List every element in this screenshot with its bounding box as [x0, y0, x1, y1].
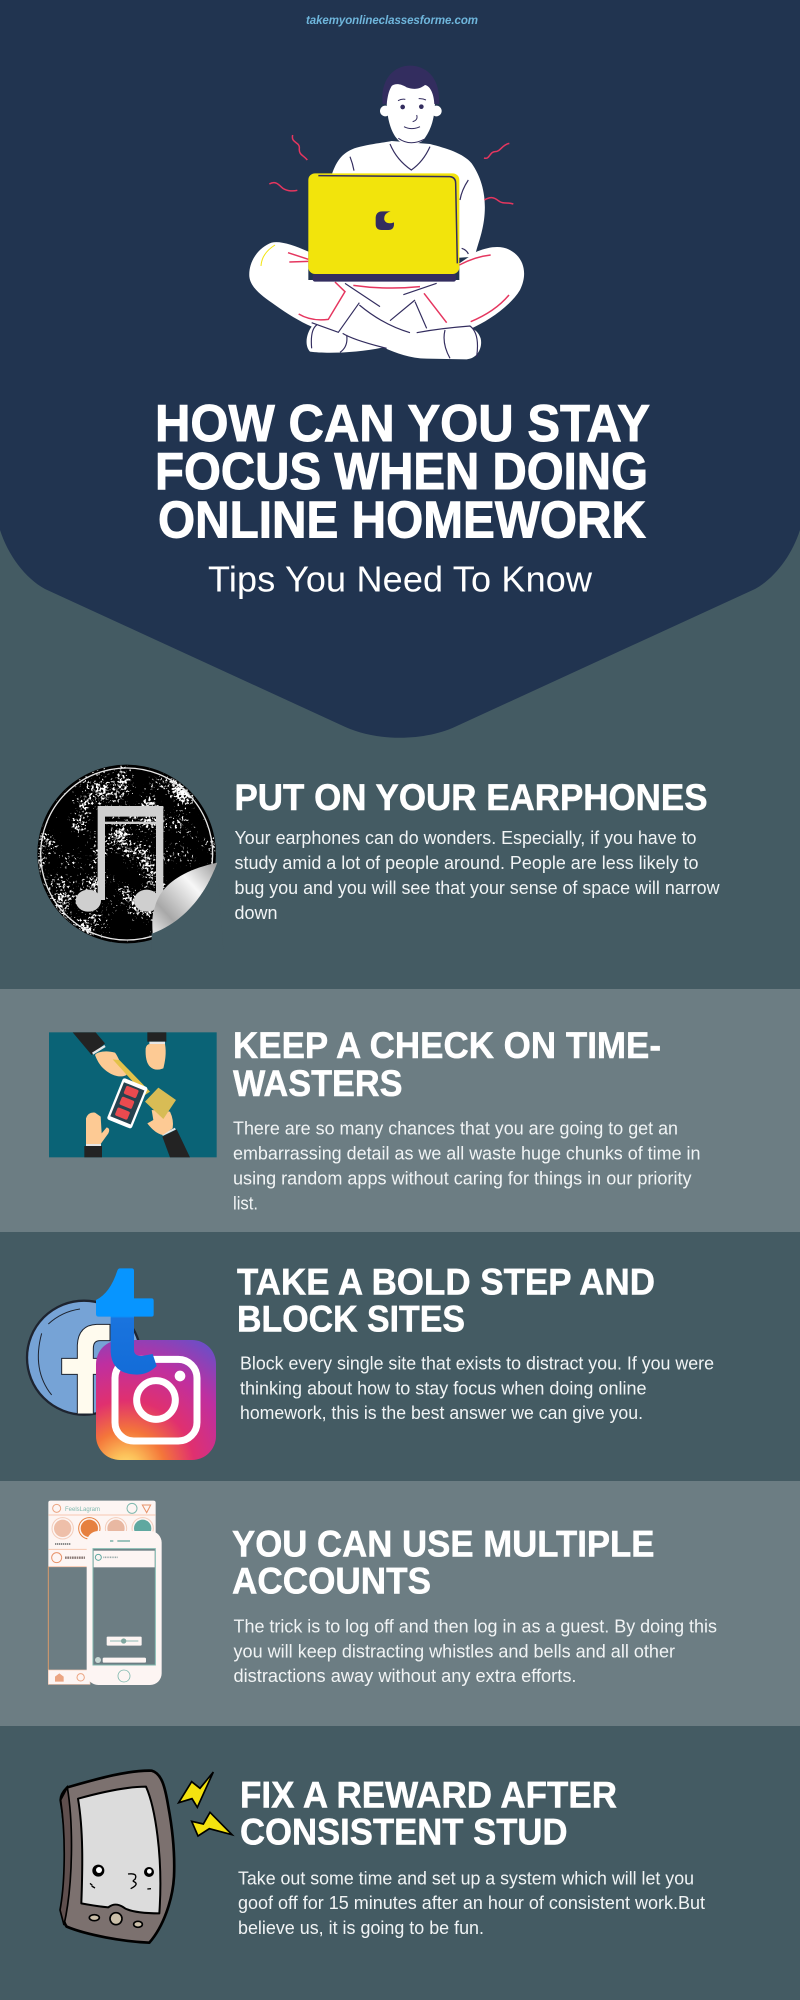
body text: believe us, it is going to be fun. [238, 1917, 484, 1938]
image: hands swatting a phone [49, 1032, 217, 1157]
body text: thinking about how to stay focus when doing online [240, 1377, 646, 1398]
body text: goof off for 15 minutes after an hour of consistent work.But [238, 1892, 705, 1913]
title: HOW CAN YOU STAY [155, 395, 650, 453]
body text: study amid a lot of people around. People are less likely to [234, 852, 698, 873]
body text: Take out some time and set up a system which will let you [238, 1867, 694, 1888]
website url: takemyonlineclassesforme.com [306, 15, 478, 27]
head [350, 66, 468, 254]
body text: list. [233, 1192, 258, 1213]
panel: section 2 band [0, 989, 800, 1232]
heading [237, 1261, 655, 1340]
body text [234, 1615, 717, 1686]
panel: section 2 [49, 1025, 700, 1213]
body text: There are so many chances that you are going to get an [233, 1117, 678, 1138]
body text: distractions away without any extra efforts. [234, 1665, 576, 1686]
heading [233, 1025, 661, 1104]
heading: FIX A REWARD AFTER [240, 1775, 617, 1816]
heading: WASTERS [233, 1063, 402, 1104]
heading: ACCOUNTS [232, 1560, 431, 1601]
leg lines [288, 253, 509, 323]
body text [240, 1352, 714, 1423]
lightning bolts [179, 1772, 232, 1836]
heading: KEEP A CHECK ON TIME- [233, 1025, 661, 1066]
title: FOCUS WHEN DOING [155, 443, 648, 501]
heading: YOU CAN USE MULTIPLE [232, 1524, 654, 1565]
body text [234, 827, 720, 923]
title: ONLINE HOMEWORK [158, 492, 646, 550]
icon: two phone accounts [48, 1501, 162, 1685]
back phone [48, 1501, 156, 1684]
body text: down [234, 902, 278, 923]
panel: section 3 [27, 1261, 714, 1460]
back phone: FeelsLagram [65, 1506, 100, 1513]
body text: embarrassing detail as we all waste huge chunks of time in [233, 1142, 700, 1163]
body text: The trick is to log off and then log in as a guest. By doing this [234, 1615, 717, 1636]
buttons [89, 1915, 99, 1921]
facebook [27, 1301, 141, 1415]
panel: section 1 [37, 765, 720, 950]
screen [78, 1787, 160, 1913]
body text: bug you and you will see that your sense of space will narrow [234, 877, 720, 898]
front phone [87, 1531, 162, 1685]
legs [249, 242, 524, 359]
subtitle: Tips You Need To Know [208, 558, 593, 600]
title [155, 395, 650, 550]
illustration: man with laptop [249, 66, 524, 359]
panel: section 5 [60, 1771, 705, 1943]
body text: using random apps without caring for things in our priority [233, 1167, 692, 1188]
face [92, 1865, 104, 1877]
body text [233, 1117, 700, 1213]
heading: CONSISTENT STUD [240, 1811, 568, 1852]
panel: section 4 [48, 1501, 717, 1686]
laptop [308, 173, 459, 282]
icon: buzzing cartoon phone [60, 1771, 232, 1943]
body text: homework, this is the best answer we can give you. [240, 1402, 643, 1423]
heading [240, 1775, 617, 1852]
body text: Block every single site that exists to distract you. If you were [240, 1352, 714, 1373]
body text [238, 1867, 705, 1938]
tumblr [96, 1268, 157, 1375]
body text: you will keep distracting whistles and bells and all other [234, 1640, 675, 1661]
body text: Your earphones can do wonders. Especially, if you have to [234, 827, 696, 848]
icon: music sticker [37, 765, 223, 950]
heading: TAKE A BOLD STEP AND [237, 1261, 655, 1302]
torso [332, 141, 485, 267]
heading [232, 1524, 654, 1601]
heading: BLOCK SITES [237, 1299, 465, 1340]
panel: header shape [0, 0, 800, 738]
heading: PUT ON YOUR EARPHONES [234, 777, 708, 818]
instagram [96, 1340, 216, 1460]
squiggles [269, 135, 513, 204]
icon: social media logos [27, 1268, 216, 1460]
phone body [61, 1771, 174, 1943]
panel: section 4 band [0, 1481, 800, 1726]
